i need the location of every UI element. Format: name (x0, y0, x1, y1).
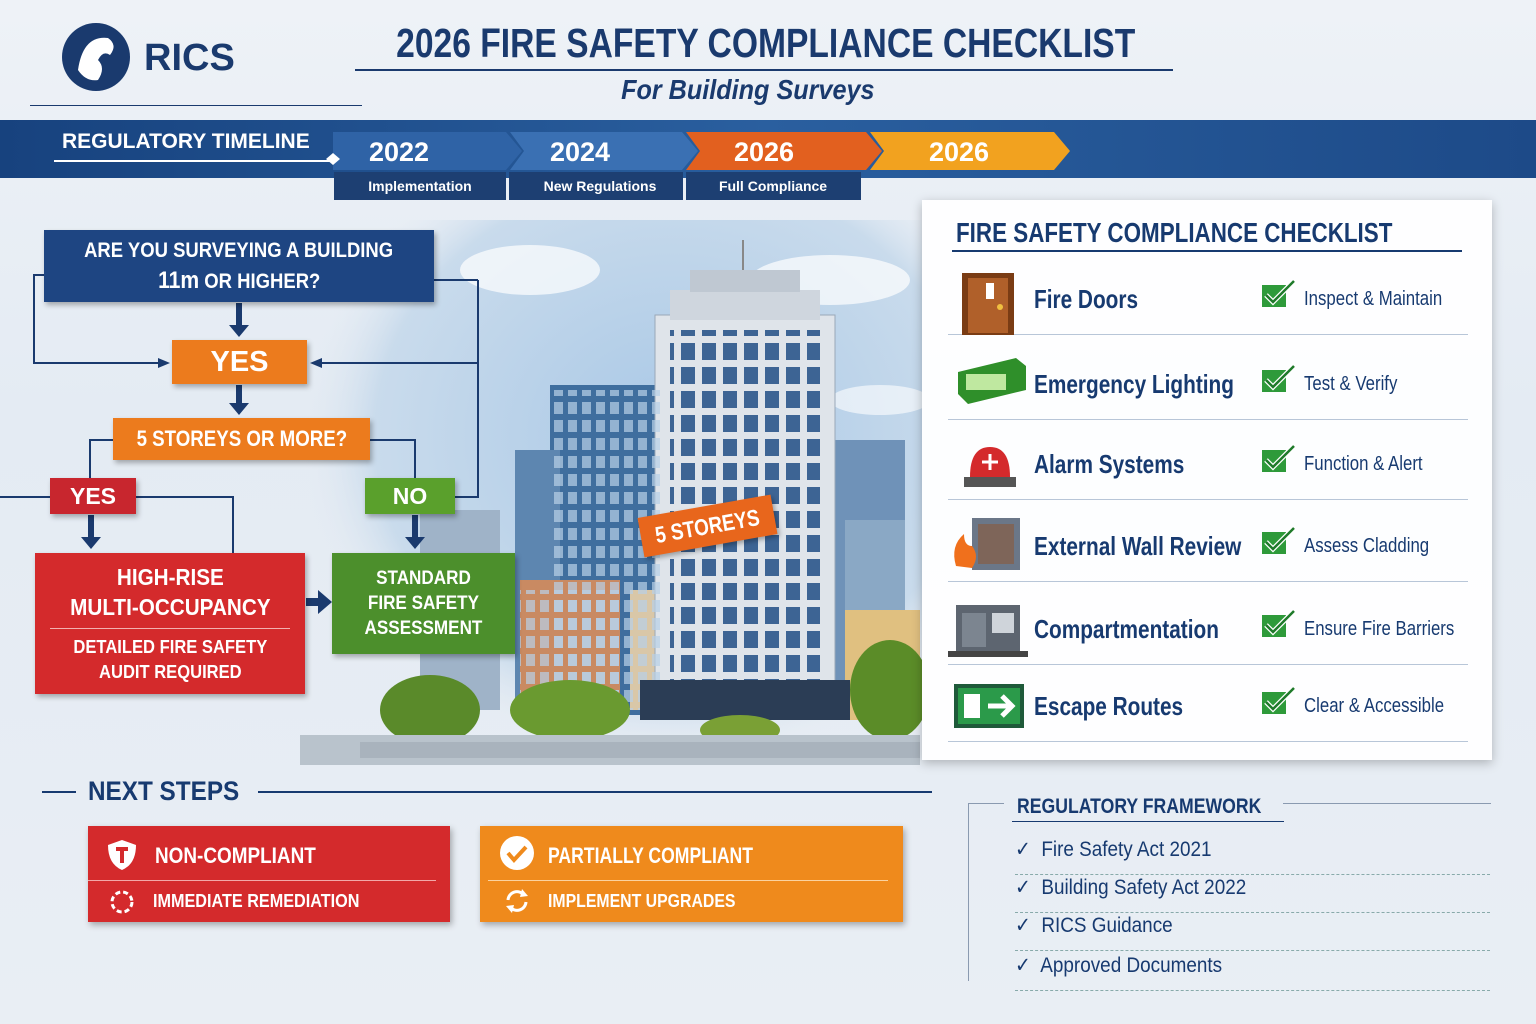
partially compliant card (480, 826, 903, 922)
checklist panel (922, 200, 1492, 760)
framework items: ✓ Fire Safety Act 2021 (1015, 838, 1212, 861)
icon: wall fire (954, 518, 1020, 570)
row: escape routes (948, 672, 1468, 742)
row: escape routes: Clear & Accessible (1304, 695, 1444, 717)
row: alarms (948, 430, 1468, 500)
text: ✓ Approved Documents (1015, 954, 1222, 977)
storeys question (113, 418, 370, 460)
icon: compartments (948, 605, 1028, 657)
row: compartmentation (948, 595, 1468, 665)
row: external wall (948, 512, 1468, 582)
row: escape routes: Escape Routes (1034, 691, 1183, 721)
timeline arrows: New Regulations (544, 178, 657, 194)
non-compliant card: IMMEDIATE REMEDIATION (153, 891, 359, 911)
timeline heading: REGULATORY TIMELINE (62, 130, 310, 153)
high-rise box: DETAILED FIRE SAFETY (73, 637, 267, 657)
timeline arrows: 2024 (550, 137, 610, 167)
non-compliant card (88, 826, 450, 922)
storeys question: 5 STOREYS OR MORE? (136, 426, 347, 451)
no green (365, 478, 455, 514)
timeline band (0, 120, 1536, 178)
yes red (50, 478, 136, 514)
row: external wall: External Wall Review (1034, 531, 1241, 561)
icon: shield (108, 840, 136, 870)
yes box: YES (210, 346, 269, 378)
text: ✓ Building Safety Act 2022 (1015, 876, 1246, 899)
icon: alarm (964, 447, 1016, 487)
timeline arrows (326, 132, 1070, 200)
row: external wall: Assess Cladding (1304, 535, 1429, 557)
high-rise box: MULTI-OCCUPANCY (70, 594, 270, 620)
timeline arrows: 2026 (734, 137, 794, 167)
timeline arrows: Full Compliance (719, 178, 827, 194)
row: alarms: Function & Alert (1304, 453, 1423, 475)
next steps heading: NEXT STEPS (88, 776, 239, 806)
text: ✓ RICS Guidance (1015, 914, 1173, 937)
timeline arrows: Implementation (368, 178, 472, 194)
tag: 5 storeys: 5 STOREYS (653, 504, 762, 548)
row: compartmentation: Compartmentation (1034, 614, 1219, 644)
icon: check circle (500, 836, 534, 870)
row: emergency lighting (948, 350, 1468, 420)
partially compliant card: PARTIALLY COMPLIANT (548, 843, 753, 868)
tag: 5 storeys (638, 495, 777, 557)
building illustration (300, 220, 922, 765)
row: emergency lighting: Test & Verify (1304, 373, 1397, 395)
high-rise box: HIGH-RISE (117, 564, 223, 590)
timeline arrows: 2026 (929, 137, 989, 167)
framework heading: REGULATORY FRAMEWORK (1017, 795, 1261, 818)
icon: exit sign (954, 684, 1024, 728)
row: fire doors: Inspect & Maintain (1304, 288, 1442, 310)
standard box: FIRE SAFETY (368, 593, 479, 614)
logo (62, 23, 235, 91)
standard box: STANDARD (376, 568, 471, 589)
standard box (332, 553, 515, 654)
row: fire doors: Fire Doors (1034, 284, 1138, 314)
no green: NO (393, 482, 427, 508)
logo: RICS (144, 37, 235, 79)
high-rise box (35, 553, 305, 694)
icon: door (962, 273, 1014, 335)
yes red: YES (70, 482, 116, 508)
row: compartmentation: Ensure Fire Barriers (1304, 618, 1454, 640)
row: alarms: Alarm Systems (1034, 449, 1184, 479)
framework items (1015, 837, 1490, 875)
question box: ARE YOU SURVEYING A BUILDING (84, 238, 394, 262)
yes box (172, 340, 307, 384)
row: emergency lighting: Emergency Lighting (1034, 369, 1234, 399)
subtitle: For Building Surveys (621, 74, 875, 105)
icon: light (958, 358, 1026, 404)
high-rise box: AUDIT REQUIRED (99, 662, 241, 682)
non-compliant card: NON-COMPLIANT (155, 843, 316, 868)
checklist title: FIRE SAFETY COMPLIANCE CHECKLIST (956, 217, 1392, 248)
standard box: ASSESSMENT (365, 618, 482, 639)
row: fire doors (948, 265, 1468, 335)
partially compliant card: IMPLEMENT UPGRADES (548, 891, 735, 911)
question box: 11m OR HIGHER? (158, 266, 320, 294)
flowchart (0, 274, 479, 614)
question box (44, 230, 434, 302)
timeline arrows: 2022 (369, 137, 429, 167)
title: 2026 FIRE SAFETY COMPLIANCE CHECKLIST (396, 20, 1136, 66)
